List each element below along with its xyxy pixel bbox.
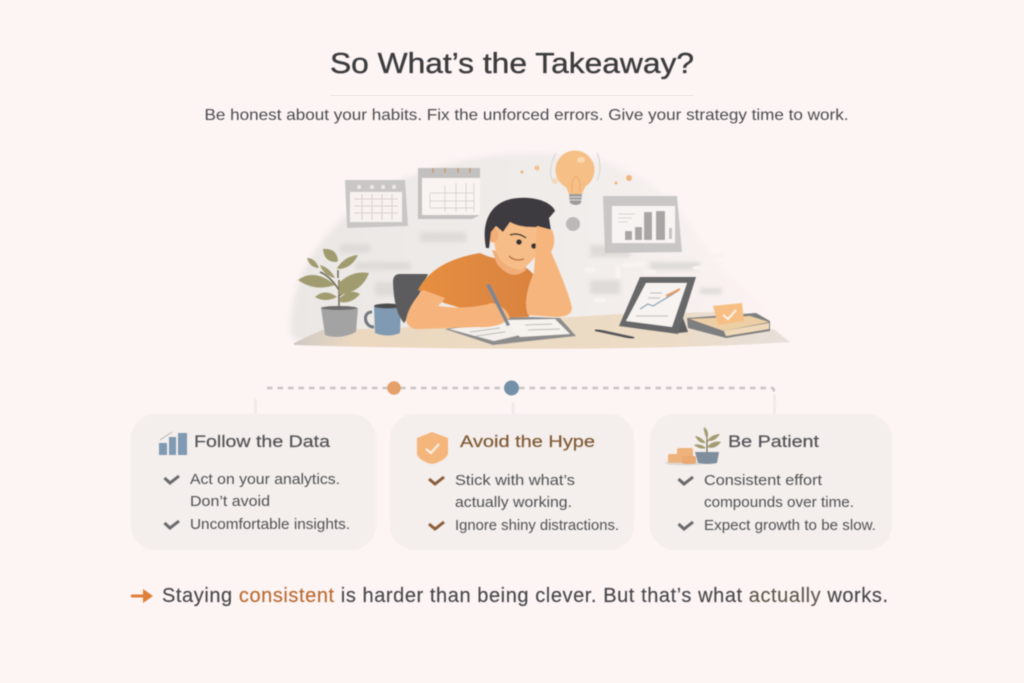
- book with badge: [687, 303, 770, 338]
- hair: [485, 198, 555, 248]
- wall bar chart: [603, 196, 682, 253]
- tablet: [619, 277, 696, 334]
- calendar right: [418, 168, 480, 219]
- checklist: Don’t avoid: [190, 494, 270, 510]
- panel: avoid the hype: [390, 414, 634, 550]
- checklist: Consistent effort: [704, 473, 822, 489]
- checklist: Uncomfortable insights.: [190, 517, 350, 533]
- notebook: [445, 316, 576, 345]
- subtitle: Be honest about your habits. Fix the unforced errors. Give your strategy time to work.: [204, 107, 848, 124]
- icon: orange arrow: [131, 589, 153, 603]
- checklist: Stick with what’s: [455, 473, 575, 489]
- checklist: actually working.: [455, 495, 572, 511]
- desk pen: [596, 330, 633, 338]
- panel: be patient: [650, 414, 892, 550]
- checklist: [164, 472, 350, 533]
- heading: Be Patient: [728, 432, 819, 451]
- heading: Follow the Data: [194, 432, 331, 451]
- checklist: Ignore shiny distractions.: [455, 518, 619, 534]
- grey circle: [566, 217, 580, 231]
- illustration backdrop: [291, 154, 771, 342]
- pen: [486, 284, 510, 326]
- chair: [393, 274, 428, 323]
- heading: Avoid the Hype: [460, 432, 595, 451]
- blue dot: [504, 380, 519, 396]
- head: [491, 217, 542, 270]
- checklist: [429, 473, 619, 534]
- left arm: [406, 290, 510, 329]
- desk: [294, 312, 790, 349]
- checklist: compounds over time.: [704, 495, 854, 511]
- checklist: Expect growth to be slow.: [704, 518, 876, 534]
- title: So What’s the Takeaway?: [330, 48, 694, 80]
- checklist: [678, 473, 876, 534]
- face details: [509, 234, 537, 260]
- orange dot: [387, 381, 401, 395]
- icon: bar chart: [159, 432, 187, 455]
- torso: [418, 253, 541, 318]
- right arm: [526, 226, 572, 317]
- calendar left: [345, 180, 408, 228]
- person: [406, 198, 572, 329]
- neck: [492, 250, 526, 275]
- illustration: person at desk: [291, 150, 790, 349]
- light bulb: [520, 150, 632, 205]
- icon: coins and plant: [665, 427, 721, 466]
- checklist: Act on your analytics.: [190, 472, 340, 488]
- ear: [488, 228, 498, 242]
- plant: [298, 249, 369, 337]
- timeline connector: [256, 380, 774, 414]
- backdrop texture: [340, 232, 722, 296]
- panel: follow the data: [131, 414, 376, 550]
- icon: shield: [417, 432, 448, 464]
- closing statement: Staying consistent is harder than being clever. But that’s what actually works.: [162, 585, 888, 607]
- coffee mug: [365, 304, 401, 336]
